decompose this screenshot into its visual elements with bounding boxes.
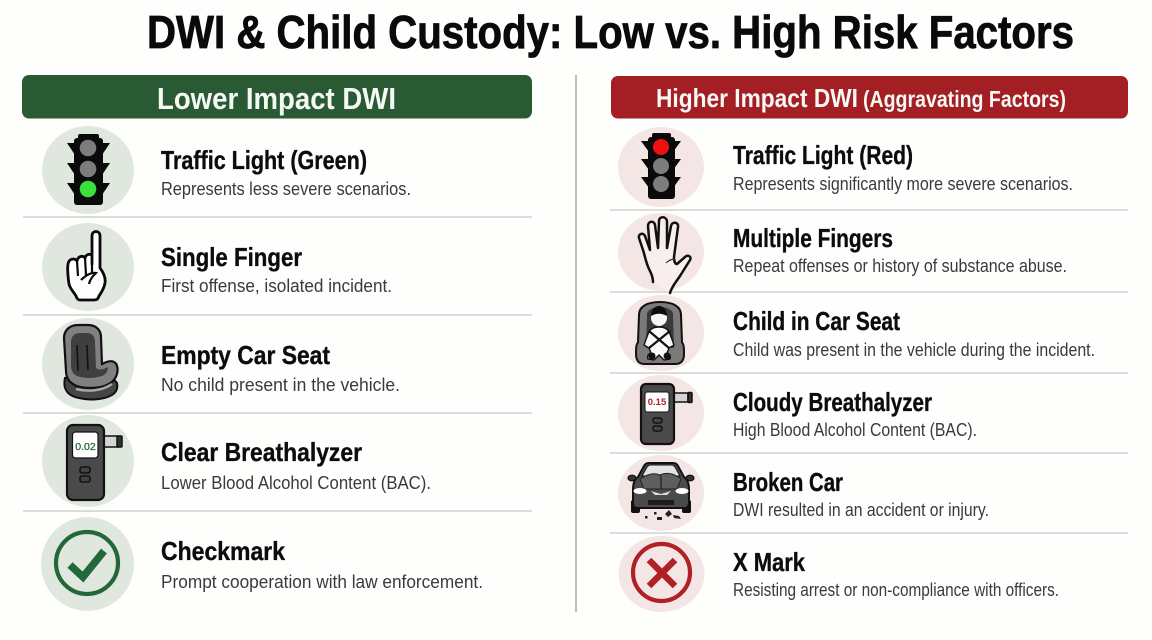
text: traffic light green: Represents less severe scenarios. [161,178,411,199]
icon: child in car seat [618,295,704,371]
text: single finger [161,242,392,296]
text: child in car seat: Child in Car Seat [733,306,900,336]
text: broken car: Broken Car [733,467,843,497]
text: cloudy breathalyzer [733,387,977,440]
text: traffic light red [733,140,1073,194]
text: X mark [733,547,1059,600]
icon: clear breathalyzer: 0.02 [75,441,96,453]
icon: green traffic light [42,126,134,214]
text: clear breathalyzer: Clear Breathalyzer [161,437,362,467]
text: single finger: First offense, isolated incident. [161,275,392,296]
panel: higher impact DWI [610,76,1128,612]
text: cloudy breathalyzer: Cloudy Breathalyzer [733,387,932,417]
text: clear breathalyzer: Lower Blood Alcohol Content (BAC). [161,472,431,493]
text: child in car seat [733,306,1095,360]
text: empty car seat [161,340,400,395]
icon: cloudy breathalyzer [618,375,704,451]
text: single finger: Single Finger [161,242,302,272]
heading: lower impact: Lower Impact DWI [157,82,396,116]
icon: empty car seat [42,318,134,410]
icon: cloudy breathalyzer: 0.15 [648,397,667,408]
heading: higher impact: Higher Impact DWI [656,83,858,113]
icon: checkmark [41,517,134,611]
text: checkmark: Checkmark [161,536,285,566]
text: empty car seat: No child present in the vehicle. [161,374,400,395]
text: clear breathalyzer [161,437,431,493]
text: broken car [733,467,989,520]
text: multiple fingers: Repeat offenses or history of substance abuse. [733,255,1067,276]
text: traffic light green [161,145,411,199]
text: checkmark [161,536,483,592]
text: traffic light red: Represents significantly more severe scenarios. [733,173,1073,194]
heading: lower impact [22,75,532,118]
panel: lower impact DWI [22,75,532,611]
icon: single finger [42,223,134,311]
text: traffic light green: Traffic Light (Green) [161,145,367,175]
icon: multiple fingers [618,213,704,293]
text: broken car: DWI resulted in an accident or injury. [733,499,989,520]
heading: higher impact: (Aggravating Factors) [863,86,1066,112]
text: X mark: X Mark [733,547,805,577]
text: multiple fingers: Multiple Fingers [733,223,893,253]
text: cloudy breathalyzer: High Blood Alcohol Content (BAC). [733,419,977,440]
icon: red traffic light [618,127,704,207]
text: traffic light red: Traffic Light (Red) [733,140,913,170]
text: multiple fingers [733,223,1067,276]
icon: broken car [618,455,704,531]
heading: higher impact [611,76,1128,118]
text: X mark: Resisting arrest or non-compliance with officers. [733,579,1059,600]
text: checkmark: Prompt cooperation with law enforcement. [161,571,483,592]
text: empty car seat: Empty Car Seat [161,340,330,370]
icon: clear breathalyzer [42,415,134,507]
icon: X mark [618,536,704,612]
text: child in car seat: Child was present in the vehicle during the incident. [733,339,1095,360]
